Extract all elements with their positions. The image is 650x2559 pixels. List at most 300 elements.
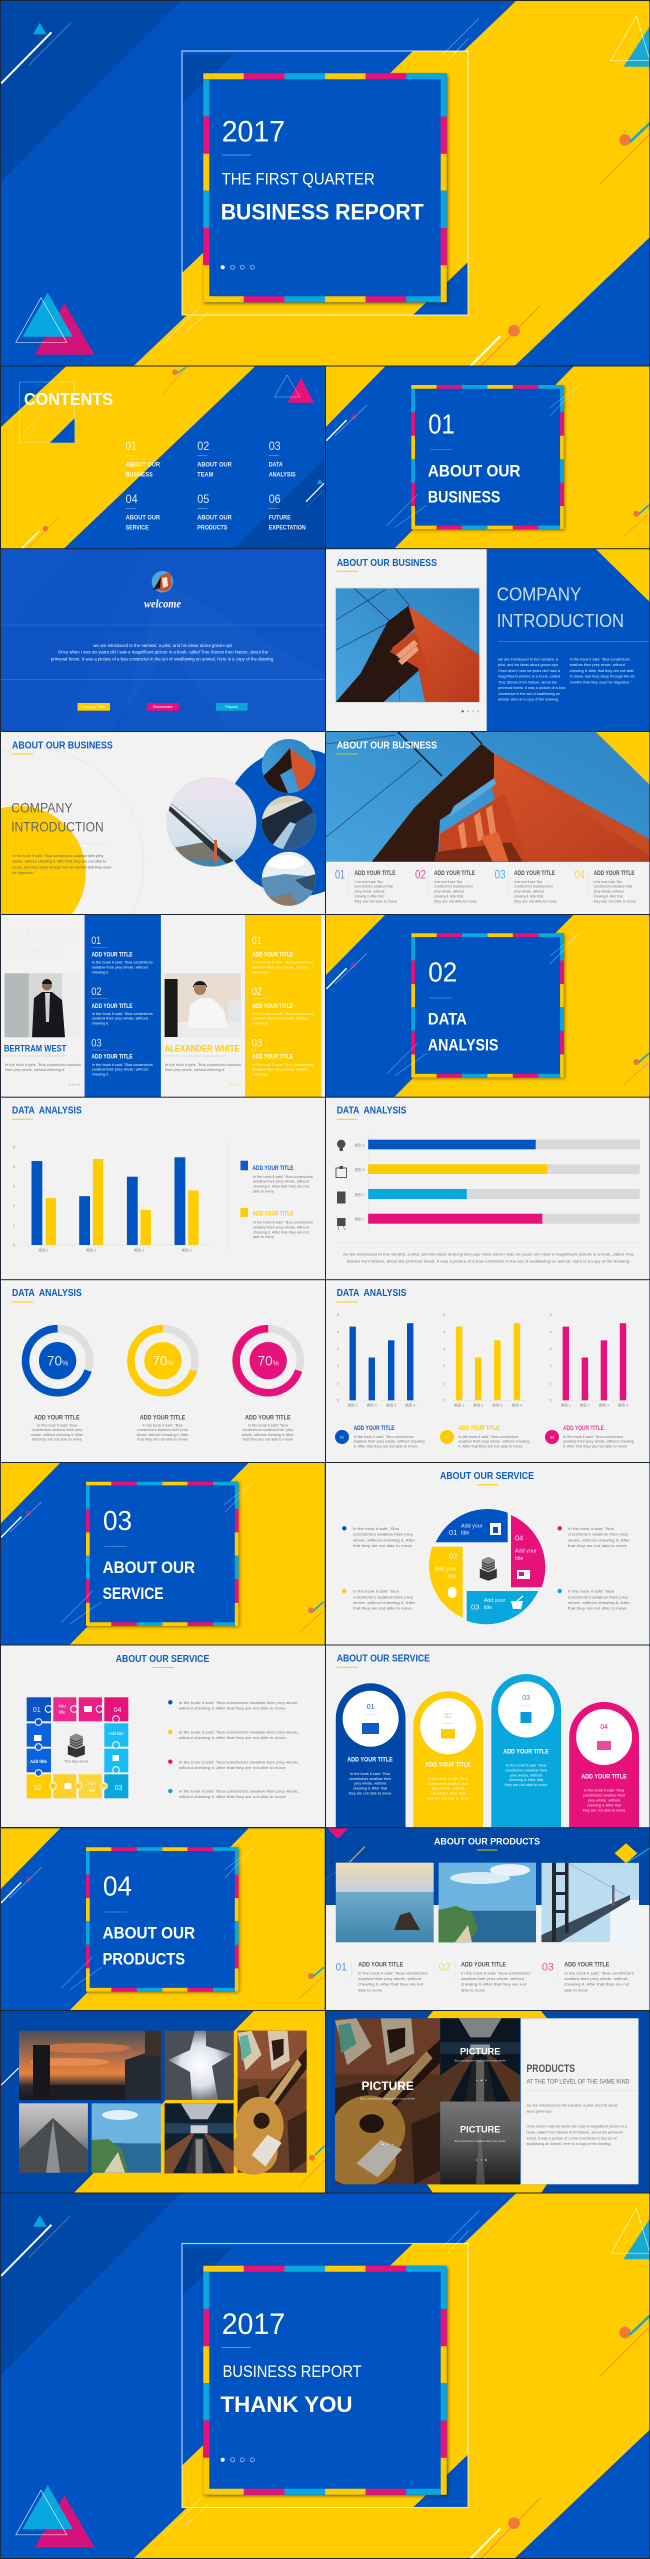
note yellow: ADD YOUR TITLE bbox=[458, 1426, 500, 1432]
note blue: it. After that they are not able to move bbox=[354, 1445, 418, 1449]
item 01: prey whole, without bbox=[354, 890, 384, 894]
bullet list: In the book it said: "Boa constrictors swallow their prey whole, bbox=[179, 1759, 299, 1764]
note blue: ADD YOUR TITLE bbox=[354, 1426, 395, 1432]
horizontal bar chart bbox=[354, 1132, 640, 1231]
welcome paragraph: primeval forest. It was a picture of a boa constrictor in the act of swallowing an animal. Here is a copy of the drawing. bbox=[51, 656, 274, 661]
chart magenta: 类别 4 bbox=[618, 1403, 628, 1408]
contents title: CONTENTS bbox=[24, 389, 113, 409]
chart blue: 0 bbox=[337, 1398, 339, 1402]
slide: section 02 bbox=[326, 914, 650, 1097]
welcome emblem bbox=[152, 571, 173, 592]
item 01: ADD YOUR TITLE bbox=[358, 1962, 403, 1969]
cover subtitle: THE FIRST QUARTER bbox=[222, 170, 375, 188]
bullets left: constrictors swallow their prey bbox=[353, 1532, 413, 1537]
section number: 01 bbox=[428, 408, 455, 439]
contents triangles bbox=[274, 375, 314, 403]
contents item 05 bbox=[197, 494, 232, 531]
photo: coast bbox=[439, 1863, 536, 1942]
photo: Alexander White bbox=[165, 973, 241, 1037]
chart yellow: 2 bbox=[443, 1364, 445, 1368]
item 02: chewing it. After that bbox=[434, 894, 463, 898]
column: blue list: 03 bbox=[91, 1037, 102, 1049]
pager dots bbox=[462, 710, 479, 712]
item 04: chewing it. After that bbox=[594, 894, 623, 898]
column: blue list: chewing it. bbox=[92, 1022, 109, 1026]
pie segment 03: 03 bbox=[471, 1603, 479, 1612]
contents item 06: EXPECTATION bbox=[269, 524, 306, 531]
paragraph bbox=[343, 1252, 635, 1263]
clustered bar chart: 5 bbox=[13, 1145, 15, 1149]
note magenta: 03 bbox=[550, 1436, 554, 1440]
photo: star skyline bbox=[165, 2031, 234, 2100]
photo: Bertram West bbox=[5, 973, 81, 1037]
pill 01: constrictors swallow their bbox=[349, 1777, 392, 1781]
pie segment 03: title bbox=[484, 1605, 492, 1611]
caption magenta: whole, without chewing it. After bbox=[242, 1433, 294, 1437]
chart blue: 类别 2 bbox=[367, 1403, 377, 1408]
clustered bar chart: 0 bbox=[13, 1243, 15, 1247]
puzzle ring: Add bbox=[58, 1704, 66, 1708]
donut magenta bbox=[236, 1329, 300, 1393]
section title: DATA bbox=[428, 1011, 467, 1029]
item 02: they are not able to move bbox=[434, 899, 477, 903]
pill 02 bbox=[413, 1691, 483, 1828]
slide: about business photo bbox=[326, 732, 650, 914]
caption blue: constrictors swallow their prey bbox=[32, 1428, 82, 1432]
slide: horizontal bars bbox=[326, 1098, 650, 1280]
chart blue: 1 bbox=[337, 1381, 339, 1385]
contents item 05: ABOUT OUR bbox=[197, 515, 232, 522]
contents item 01: ABOUT OUR bbox=[126, 462, 160, 469]
photo circle: tower bbox=[261, 739, 317, 793]
column: blue list: In the book it said: "Boa constrictors bbox=[92, 1063, 153, 1067]
caption magenta: In the book it said: "Boa bbox=[248, 1423, 289, 1427]
note blue: swallow their prey whole, without chewing bbox=[354, 1440, 425, 1444]
note magenta: swallow their prey whole, without chewing bbox=[563, 1440, 634, 1444]
contents item 04: 04 bbox=[126, 494, 138, 506]
puzzle ring: Add title bbox=[30, 1759, 48, 1764]
slide: three bar charts bbox=[326, 1280, 650, 1462]
item 01: chewing it. After that they are not bbox=[358, 1982, 424, 1987]
slide: company introduction blue bbox=[326, 549, 650, 731]
column: blue list: swallow their prey whole, without bbox=[92, 1017, 148, 1021]
column: yellow list: swallow their prey whole, without bbox=[252, 1068, 308, 1072]
panel: products text bbox=[521, 2018, 638, 2184]
bullets left: that they are not able to move bbox=[353, 1606, 413, 1611]
caption yellow: In the book it said: "Boa bbox=[143, 1423, 183, 1427]
puzzle ring: 01 bbox=[33, 1707, 41, 1714]
paragraph bbox=[12, 854, 111, 875]
item 02: able to move bbox=[461, 1987, 485, 1992]
pill 04 bbox=[569, 1702, 639, 1828]
hero photo: bridge tower bbox=[326, 732, 650, 862]
chart yellow: 0 bbox=[443, 1398, 445, 1402]
column: yellow list: chewing it. bbox=[252, 1073, 269, 1077]
photo circle: road bbox=[261, 795, 317, 851]
pie segment 02 bbox=[429, 1547, 463, 1618]
column: yellow list: 03 bbox=[252, 1037, 262, 1049]
item 01: able to move bbox=[358, 1987, 382, 1992]
chart magenta: 4 bbox=[550, 1330, 552, 1334]
item 03: constrictors swallow their bbox=[514, 885, 554, 889]
cover title: BUSINESS REPORT bbox=[221, 199, 424, 224]
item 04: constrictors swallow their bbox=[594, 885, 633, 889]
item 01: In the book it said: "Boa constrictors bbox=[358, 1970, 428, 1975]
pill 02: 02 bbox=[444, 1713, 452, 1720]
name: Alexander White: their prey whole, without chewing it. bbox=[165, 1068, 225, 1072]
slide: welcome bbox=[1, 549, 325, 731]
bullet list: In the book it said: "Boa constrictors swallow their prey whole, bbox=[179, 1700, 299, 1705]
note magenta bbox=[545, 1426, 634, 1449]
paragraph: move, and they sleep through the six months that they need bbox=[12, 865, 111, 869]
intro text left: Once when I was six years old I saw a bbox=[498, 669, 561, 673]
puzzle ring: 04 bbox=[114, 1707, 121, 1714]
item 03: 03 bbox=[542, 1962, 554, 1974]
slide: section 01: BUSINESS bbox=[428, 488, 500, 506]
note yellow: In the book it said: "Boa constrictors bbox=[458, 1435, 519, 1439]
bullet list bbox=[168, 1700, 299, 1799]
caption magenta: ADD YOUR TITLE bbox=[245, 1414, 291, 1421]
slide: section 02: ANALYSIS bbox=[428, 1037, 498, 1055]
contents item 03: ANALYSIS bbox=[269, 471, 296, 478]
item 04: ADD YOUR TITLE bbox=[594, 871, 635, 877]
legend item yellow: ADD YOUR TITLE bbox=[252, 1212, 294, 1218]
clustered bar chart: 类别 3 bbox=[134, 1248, 144, 1252]
bullets left bbox=[342, 1526, 416, 1611]
note blue: In the book it said: "Boa constrictors bbox=[354, 1435, 414, 1439]
pill 03: constrictors swallow their bbox=[505, 1768, 548, 1772]
column: yellow list: ADD YOUR TITLE bbox=[252, 1004, 293, 1010]
legend item blue: swallow their prey whole, without bbox=[253, 1180, 309, 1184]
bullets right: In the book it said: "Boa bbox=[568, 1589, 615, 1594]
contents item 02 bbox=[197, 441, 232, 478]
column: blue list: swallow their prey whole, without bbox=[92, 1068, 148, 1072]
company heading bbox=[497, 585, 624, 631]
caption magenta: constrictors swallow their prey bbox=[242, 1428, 293, 1432]
item 02: 02 bbox=[415, 869, 426, 881]
section title: ABOUT OUR bbox=[103, 1925, 195, 1943]
name: Alexander White: In the book it said: "Boa constrictors swallow bbox=[165, 1063, 241, 1067]
intro text left: pilot, and his ideas about grown-ups bbox=[498, 663, 558, 667]
button: environment: Environment bbox=[153, 705, 172, 709]
clustered bar chart: 类别 2 bbox=[86, 1248, 96, 1252]
chart magenta: 类别 2 bbox=[580, 1403, 590, 1408]
slide: column chart bbox=[1, 1098, 325, 1280]
bullet list: without chewing it. After that they are not able to move bbox=[179, 1765, 287, 1770]
item 04: 04 bbox=[574, 869, 586, 881]
column: yellow list: chewing it. bbox=[252, 1022, 269, 1026]
column: yellow list: swallow their prey whole, without bbox=[252, 1017, 308, 1021]
heading: ABOUT OUR SERVICE bbox=[116, 1654, 210, 1665]
welcome script: welcome bbox=[144, 597, 182, 611]
caption yellow bbox=[137, 1414, 189, 1442]
section number: 02 bbox=[428, 957, 457, 988]
pill 04: ADD YOUR TITLE bbox=[581, 1773, 627, 1780]
donut yellow bbox=[131, 1329, 195, 1393]
pill 02: ADD YOUR TITLE bbox=[425, 1761, 471, 1768]
legend item yellow: able to move bbox=[253, 1235, 274, 1239]
panel: products text: PRODUCTS bbox=[526, 2063, 575, 2075]
intro text left: primeval forest. It was a picture of a boa bbox=[498, 686, 566, 690]
legend item yellow: In the book it said: "Boa constrictors bbox=[253, 1221, 313, 1225]
pill 01: In the book it said: "Boa bbox=[350, 1772, 391, 1776]
panel: tower picture: Boa constrictors swallow their prey whole bbox=[455, 2139, 506, 2143]
item 02: ADD YOUR TITLE bbox=[434, 871, 475, 877]
intro text left: constrictor in the act of swallowing an bbox=[498, 692, 560, 696]
item 03: swallow their prey whole, without bbox=[564, 1976, 628, 1981]
name: Alexander White bbox=[165, 1044, 241, 1085]
slide: gallery bbox=[1, 2011, 325, 2193]
panel: escalator picture: PICTURE bbox=[460, 2046, 500, 2057]
pill 02: constrictors swallow their bbox=[427, 1782, 470, 1786]
button: environment bbox=[147, 703, 179, 711]
item 01: ADD YOUR TITLE bbox=[354, 871, 396, 877]
legend item blue bbox=[240, 1161, 313, 1193]
item 01: swallow their prey whole, without bbox=[358, 1976, 422, 1981]
puzzle ring: Add title bbox=[108, 1731, 124, 1736]
contents item 04 bbox=[126, 494, 160, 531]
panel: guitar picture: PICTURE bbox=[362, 2081, 414, 2093]
chart blue: 类别 1 bbox=[348, 1403, 358, 1408]
column: blue list: 02 bbox=[91, 986, 102, 998]
button: company profile bbox=[78, 703, 110, 711]
slide: section 03 bbox=[1, 1463, 325, 1646]
item 03 bbox=[495, 869, 557, 903]
photo: sunset city bbox=[19, 2031, 161, 2100]
column: yellow list: In the book it said: "Boa constrictors bbox=[252, 1012, 313, 1016]
item 02: prey whole, without bbox=[434, 890, 464, 894]
bullets right: In the book it said: "Boa bbox=[568, 1526, 615, 1531]
photo: tower upward bbox=[19, 2103, 88, 2173]
chart yellow: 3 bbox=[443, 1347, 445, 1351]
puzzle ring: Add bbox=[88, 1781, 96, 1786]
pill 04: 04 bbox=[600, 1724, 608, 1731]
intro text right: chewing it. After that they are not able bbox=[570, 669, 634, 673]
paragraph: for digestion." bbox=[12, 871, 36, 875]
icon: building bbox=[68, 1734, 85, 1758]
pill 02: they are not able to move bbox=[427, 1796, 469, 1800]
note magenta: it. After that they are not able to move bbox=[563, 1445, 627, 1449]
heading: DATA ANALYSIS bbox=[337, 1288, 407, 1299]
column: blue list: ADD YOUR TITLE bbox=[92, 1055, 132, 1061]
puzzle ring: 03 bbox=[115, 1785, 122, 1792]
contents item 01 bbox=[126, 441, 160, 478]
item 03 bbox=[542, 1962, 634, 1992]
panel: products text: forest. It was a picture of a boa constrictor in the act of bbox=[526, 2135, 617, 2140]
bullet list: In the book it said: "Boa constrictors swallow their prey whole, bbox=[179, 1789, 299, 1794]
slide: section 03: SERVICE bbox=[103, 1585, 164, 1603]
faint heading bbox=[11, 925, 79, 960]
pill 01: they are not able to move bbox=[349, 1791, 391, 1795]
section title: ABOUT OUR bbox=[103, 1559, 195, 1577]
contents item 01: 01 bbox=[126, 441, 137, 453]
item 03: In the book it said: "Boa bbox=[514, 880, 543, 884]
bullets left: that they are not able to move bbox=[353, 1543, 413, 1548]
panel: guitar picture: Boa constrictors swallow their prey whole bbox=[360, 2097, 415, 2101]
contents item 05: 05 bbox=[197, 494, 209, 506]
chart yellow: 5 bbox=[443, 1313, 445, 1317]
pill 03: they are not able to move bbox=[505, 1783, 547, 1787]
pill 04: prey whole, without bbox=[588, 1799, 621, 1803]
pie segment 02: Add your bbox=[435, 1567, 457, 1573]
photo circle: suspension bridge bbox=[166, 777, 258, 868]
name: Bertram West bbox=[4, 1044, 81, 1085]
chart magenta bbox=[550, 1313, 633, 1408]
bullets left: whole, without chewing it. After bbox=[353, 1600, 416, 1605]
donut blue: 70% bbox=[47, 1354, 68, 1369]
pill 02: In the book it said: "Boa bbox=[428, 1777, 469, 1781]
bullet list: In the book it said: "Boa constrictors swallow their prey whole, bbox=[179, 1730, 299, 1735]
section number: 03 bbox=[103, 1505, 132, 1536]
column: blue list: ADD YOUR TITLE bbox=[92, 1004, 132, 1010]
legend item yellow: swallow their prey whole, without bbox=[253, 1225, 309, 1229]
button: company profile: Company Profile bbox=[81, 705, 106, 709]
panel: escalator picture: Boa constrictors swallow their prey whole bbox=[455, 2059, 506, 2063]
contents item 01: BUSINESS bbox=[126, 471, 153, 478]
item 03: In the book it said: "Boa constrictors bbox=[564, 1970, 634, 1975]
chart blue: 3 bbox=[337, 1347, 339, 1351]
puzzle ring: title bbox=[89, 1788, 96, 1793]
cover year: 2017 bbox=[222, 116, 285, 149]
puzzle ring bbox=[27, 1697, 128, 1798]
clustered bar chart: 4 bbox=[13, 1165, 15, 1169]
bullet list: without chewing it. After that they are not able to move bbox=[179, 1794, 287, 1799]
pill 04: chewing it. After that bbox=[587, 1803, 622, 1807]
column: blue list: ADD YOUR TITLE bbox=[92, 953, 132, 959]
slide: donuts bbox=[1, 1280, 325, 1462]
donut blue bbox=[26, 1329, 90, 1393]
item 03: ADD YOUR TITLE bbox=[514, 871, 555, 877]
contents item 06: FUTURE bbox=[269, 515, 291, 522]
column: yellow list: ADD YOUR TITLE bbox=[252, 1055, 293, 1061]
contents item 02: 02 bbox=[197, 441, 209, 453]
clustered bar chart: 类别 1 bbox=[38, 1248, 49, 1252]
slide: company introduction circles bbox=[1, 732, 325, 914]
chart magenta: 0 bbox=[550, 1398, 552, 1402]
chart yellow: 4 bbox=[443, 1330, 445, 1334]
pie segment 01: Add your bbox=[461, 1524, 483, 1530]
chart magenta: 类别 1 bbox=[561, 1403, 571, 1408]
panel: tower picture bbox=[440, 2102, 520, 2184]
pie segment 03 bbox=[467, 1591, 538, 1624]
note magenta: ADD YOUR TITLE bbox=[563, 1426, 604, 1432]
note yellow: 02 bbox=[445, 1436, 449, 1440]
item 01: 01 bbox=[336, 1962, 347, 1974]
intro text left: magnificent picture in a book, called bbox=[498, 675, 560, 679]
intro text right: months that they need for digestion." bbox=[570, 680, 632, 684]
pill 01: 01 bbox=[367, 1704, 375, 1711]
puzzle ring: 02 bbox=[34, 1785, 41, 1792]
intro text right: In the book it said: "Boa constrictors bbox=[570, 657, 630, 661]
column: yellow list: swallow their prey whole, without bbox=[252, 965, 308, 969]
panel: guitar picture bbox=[335, 2018, 440, 2184]
horizontal bar chart: 类别 1 bbox=[354, 1217, 365, 1222]
chart yellow bbox=[443, 1313, 526, 1408]
company heading bbox=[12, 803, 103, 832]
pill 03 bbox=[491, 1674, 561, 1828]
clustered bar chart: 类别 4 bbox=[182, 1248, 192, 1252]
caption yellow: that they are not able to move bbox=[137, 1438, 188, 1442]
column: blue list: 01 bbox=[91, 935, 101, 947]
item 04 bbox=[574, 869, 636, 903]
caption magenta: that they are not able to move bbox=[243, 1438, 293, 1442]
note magenta: In the book it said: "Boa constrictors bbox=[563, 1435, 623, 1439]
chart yellow: 类别 1 bbox=[454, 1403, 464, 1408]
panel: products text: book, called True Stories from Nature, about the primeval bbox=[526, 2129, 623, 2134]
intro text right bbox=[570, 657, 635, 684]
item 02: 02 bbox=[439, 1962, 451, 1974]
item 01: chewing it. After that bbox=[354, 894, 384, 898]
chart magenta: 3 bbox=[550, 1347, 552, 1351]
item 01 bbox=[336, 1962, 428, 1992]
pill 01 bbox=[336, 1683, 406, 1828]
slide: service pie bbox=[326, 1463, 650, 1644]
legend item blue: chewing it. After that they are not bbox=[253, 1185, 309, 1189]
section title: ABOUT OUR bbox=[428, 462, 520, 480]
item 02: In the book it said: "Boa bbox=[434, 880, 463, 884]
welcome paragraph: we are introduced to the narrator, a pilot, and his ideas about grown-ups bbox=[93, 643, 232, 648]
column: yellow list: chewing it. bbox=[252, 971, 269, 975]
contents item 04: ABOUT OUR bbox=[126, 515, 160, 522]
bullets left: In the book it said: "Boa bbox=[353, 1526, 400, 1531]
intro text left: True Stories from Nature, about the bbox=[498, 680, 557, 684]
slide: closing bbox=[0, 2192, 650, 2559]
note yellow bbox=[440, 1426, 530, 1449]
contents item 02: ABOUT OUR bbox=[197, 462, 232, 469]
pill 03: chewing it. After that bbox=[509, 1778, 544, 1782]
column: blue list: chewing it. bbox=[92, 1073, 109, 1077]
key word: The key word bbox=[64, 1758, 88, 1764]
button: purpose bbox=[216, 703, 248, 711]
paragraph: we are introduced to the narrator, a pilot, and his ideas about grown-ups Once when I was six years old I saw a magnificent picture in a book, called True bbox=[343, 1252, 635, 1257]
clustered bar chart: 3 bbox=[13, 1184, 15, 1188]
clustered bar chart bbox=[13, 1145, 211, 1252]
item 04: In the book it said: "Boa bbox=[594, 880, 622, 884]
caption yellow: whole, without chewing it. After bbox=[137, 1433, 189, 1437]
bullets right: whole, without chewing it. After bbox=[568, 1537, 631, 1542]
item 03: 03 bbox=[495, 869, 506, 881]
photo: coast bbox=[92, 2103, 161, 2173]
item 01: constrictors swallow their bbox=[354, 885, 394, 889]
note yellow: it. After that they are not able to move bbox=[458, 1445, 522, 1449]
photo: bridge tower bbox=[336, 588, 479, 702]
intro text left: we are introduced to the narrator, a bbox=[498, 657, 559, 661]
icons bbox=[336, 1140, 346, 1230]
chart yellow: 类别 4 bbox=[512, 1403, 522, 1408]
chart yellow: 1 bbox=[443, 1381, 445, 1385]
pie segment 01 bbox=[436, 1509, 508, 1542]
heading: ABOUT OUR BUSINESS bbox=[337, 558, 437, 569]
pie segment 04: 04 bbox=[515, 1533, 523, 1542]
intro text right: swallow their prey whole, without bbox=[570, 663, 625, 667]
legend item blue: ADD YOUR TITLE bbox=[252, 1166, 294, 1172]
pie segment 02: 02 bbox=[449, 1551, 457, 1560]
paragraph: whole, without chewing it. After that they are not able to bbox=[12, 860, 106, 864]
column: yellow list: 01 bbox=[252, 935, 262, 947]
pill 03: 03 bbox=[522, 1695, 530, 1702]
pill 03: In the book it said: "Boa bbox=[506, 1764, 547, 1768]
item 03: chewing it. After that bbox=[514, 894, 543, 898]
paragraph: In the book it said: "Boa constrictors swallow their prey bbox=[12, 854, 103, 858]
photo: escalator bbox=[165, 2103, 234, 2173]
panel: escalator picture bbox=[440, 2018, 520, 2102]
pie segment 01: 01 bbox=[449, 1528, 457, 1537]
item 04: prey whole, without bbox=[594, 890, 624, 894]
item 03: prey whole, without bbox=[514, 890, 544, 894]
slide: cover bbox=[0, 0, 650, 366]
chart yellow: 类别 2 bbox=[473, 1403, 483, 1408]
paragraph: Stories from Nature, about the primeval forest. It was a picture of a boa constrictor in the act of swallowing an animal. Here is a copy of the drawing. bbox=[347, 1258, 630, 1263]
